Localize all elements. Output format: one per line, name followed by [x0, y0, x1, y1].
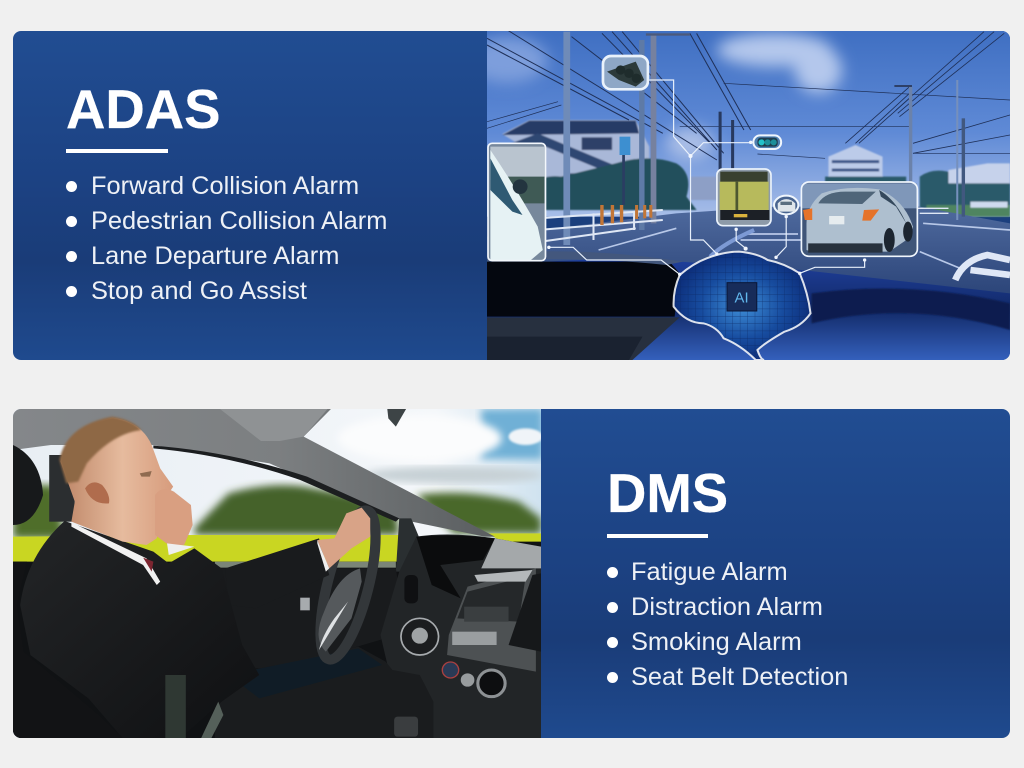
clouds — [467, 33, 842, 160]
detection: overhead traffic light — [603, 56, 648, 89]
photo: road scene seen from the dashboard with AI detection — [487, 31, 1010, 360]
panel: ADAS — [13, 31, 1010, 360]
detection: white van — [488, 143, 545, 261]
road markings — [599, 223, 1010, 280]
list item: Lane Departure Alarm — [91, 242, 339, 270]
list item: Smoking Alarm — [631, 628, 802, 656]
driver body — [20, 521, 259, 738]
feature list: ADAS — [66, 172, 387, 305]
dark cabin base — [10, 532, 543, 742]
list item: Stop and Go Assist — [91, 277, 307, 305]
list item: Forward Collision Alarm — [91, 172, 359, 200]
heading: ADAS: ADAS — [66, 79, 220, 140]
panel: DMS — [13, 409, 1010, 738]
photo: drowsy driver yawning at the wheel — [13, 409, 541, 738]
sky — [10, 405, 543, 538]
buildings and trees — [494, 120, 1010, 217]
detection: truck — [717, 169, 771, 226]
sky — [487, 30, 1010, 217]
dashboard — [487, 259, 1010, 360]
detection: distant traffic light — [753, 135, 781, 149]
seat — [13, 445, 123, 738]
road — [487, 207, 1010, 297]
dashboard — [380, 535, 541, 738]
list item: Pedestrian Collision Alarm — [91, 207, 387, 235]
poles and wires — [487, 30, 1010, 160]
list item: Distraction Alarm — [631, 593, 823, 621]
AI brain — [674, 252, 811, 360]
door panel and console — [222, 568, 399, 668]
detection: silver car — [801, 182, 917, 256]
blurred treeline — [13, 485, 541, 538]
driver legs — [215, 647, 433, 738]
grass field — [13, 535, 403, 562]
detection connector lines — [549, 80, 865, 274]
driver head — [59, 417, 194, 555]
list item: Fatigue Alarm — [631, 558, 788, 586]
heading: DMS: DMS — [607, 463, 728, 524]
driver arm on wheel — [225, 538, 329, 608]
roadside fence and barriers — [538, 208, 948, 242]
steering wheel — [309, 506, 387, 664]
hand covering mouth — [155, 489, 193, 545]
detection: small distant car — [774, 196, 798, 214]
car roof and A-pillar — [13, 409, 495, 537]
list item: Seat Belt Detection — [631, 663, 848, 691]
feature list: DMS — [607, 558, 848, 691]
chip label: AI — [735, 291, 749, 307]
